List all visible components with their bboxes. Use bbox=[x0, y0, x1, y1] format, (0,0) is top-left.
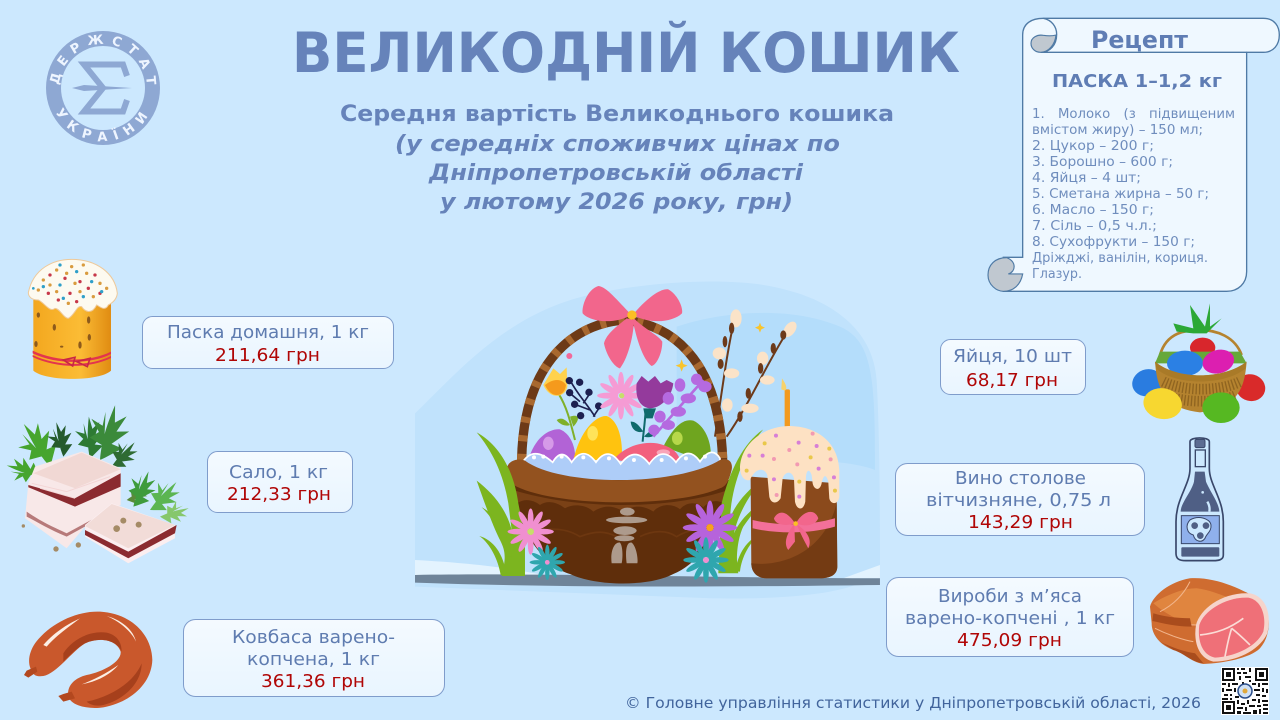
grass bbox=[477, 429, 764, 576]
subtitle bbox=[340, 102, 894, 215]
label: sausage: 361,36 грн bbox=[261, 672, 365, 692]
illustration backdrop bbox=[415, 282, 880, 598]
label: eggs bbox=[940, 340, 1086, 394]
ground line bbox=[415, 574, 880, 587]
recipe text: 3. Борошно – 600 г; bbox=[1032, 155, 1173, 170]
recipe subheading: ПАСКА 1–1,2 кг bbox=[1052, 71, 1222, 92]
kulich with candle bbox=[740, 378, 839, 578]
eggs bbox=[528, 416, 711, 467]
icon: salo with herbs bbox=[3, 401, 192, 563]
label: paska: 211,64 грн bbox=[215, 346, 320, 366]
label: meat products bbox=[886, 578, 1134, 656]
label: wine: Вино столове bbox=[955, 469, 1086, 489]
QR code bbox=[1221, 667, 1269, 715]
recipe text bbox=[1032, 107, 1235, 282]
icon: wine bottle bbox=[1176, 438, 1223, 561]
logo: Derzhstat bbox=[46, 31, 160, 145]
footer source: © Головне управління статистики у Дніпропетровській області, 2026 bbox=[625, 694, 1201, 712]
ground flowers bbox=[508, 500, 737, 583]
recipe text: 5. Сметана жирна – 50 г; bbox=[1032, 187, 1209, 202]
recipe text: вмістом жиру) – 150 мл; bbox=[1032, 123, 1203, 138]
label: eggs: Яйця, 10 шт bbox=[953, 347, 1072, 367]
label: sausage bbox=[184, 620, 444, 696]
label: sausage: Ковбаса варено- bbox=[232, 628, 395, 648]
recipe heading: Рецепт bbox=[1091, 26, 1188, 54]
subtitle: Дніпропетровській області bbox=[428, 161, 803, 186]
flowers in basket bbox=[543, 323, 765, 442]
icon: paska bbox=[28, 259, 117, 379]
label: wine: 143,29 грн bbox=[968, 513, 1073, 533]
label: eggs: 68,17 грн bbox=[966, 371, 1058, 391]
label: salo: 212,33 грн bbox=[227, 485, 331, 505]
label: meat products: Вироби з м’яса bbox=[938, 587, 1082, 607]
icon: basket with eggs bbox=[1128, 303, 1268, 423]
willow branches bbox=[713, 309, 799, 437]
recipe text: 1. Молоко (з підвищеним bbox=[1032, 107, 1235, 122]
recipe text: 6. Масло – 150 г; bbox=[1032, 203, 1154, 218]
bow bbox=[583, 286, 682, 368]
panel: recipe scroll bbox=[988, 18, 1279, 291]
icon: sausage bbox=[24, 612, 152, 708]
basket body bbox=[507, 459, 732, 583]
handle bbox=[522, 320, 723, 460]
subtitle: (у середніх споживчих цінах по bbox=[395, 132, 840, 157]
recipe text: 2. Цукор – 200 г; bbox=[1032, 139, 1154, 154]
label: wine bbox=[896, 464, 1144, 536]
recipe text: 7. Сіль – 0,5 ч.л.; bbox=[1032, 219, 1157, 234]
label: salo bbox=[208, 452, 352, 512]
subtitle: у лютому 2026 року, грн) bbox=[440, 190, 793, 215]
lace napkin bbox=[522, 452, 720, 486]
label: wine: вітчизняне, 0,75 л bbox=[926, 491, 1111, 511]
recipe text: 8. Сухофрукти – 150 г; bbox=[1032, 235, 1195, 250]
recipe text: 4. Яйця – 4 шт; bbox=[1032, 171, 1141, 186]
label: paska: Паска домашня, 1 кг bbox=[167, 323, 369, 343]
label: meat products: варено-копчені , 1 кг bbox=[905, 609, 1115, 629]
icon: smoked meat bbox=[1150, 578, 1269, 664]
recipe text: Глазур. bbox=[1032, 267, 1082, 282]
title: ВЕЛИКОДНІЙ КОШИК bbox=[292, 20, 960, 85]
label: paska bbox=[142, 316, 394, 368]
logo: Derzhstat: ДЕРЖСТАТ bbox=[50, 34, 156, 85]
label: sausage: копчена, 1 кг bbox=[247, 650, 380, 670]
label: salo: Сало, 1 кг bbox=[229, 463, 328, 483]
label: meat products: 475,09 грн bbox=[957, 631, 1062, 651]
central illustration: Easter basket bbox=[415, 282, 880, 598]
recipe text: Дріжджі, ванілін, кориця. bbox=[1032, 251, 1208, 266]
subtitle: Середня вартість Великоднього кошика bbox=[340, 102, 894, 127]
logo: Derzhstat: УКРАЇНИ bbox=[56, 107, 148, 142]
